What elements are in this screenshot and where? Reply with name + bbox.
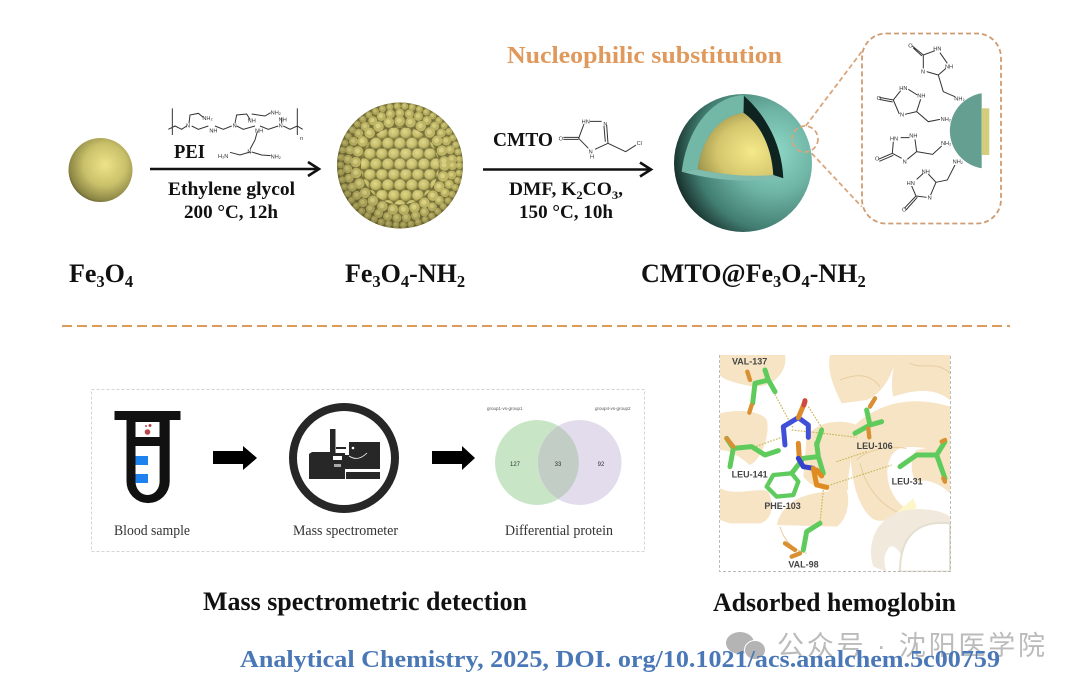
- Fe3O4 sphere: [68, 138, 132, 202]
- conditions: step one: [168, 180, 295, 223]
- image frame: [720, 355, 950, 572]
- grafted CMTO molecules: O: [902, 207, 907, 213]
- icon: mass spectrometer: [293, 407, 395, 509]
- residue sticks: [727, 370, 945, 550]
- PEI polymer structure: N: [186, 124, 190, 130]
- label: Fe3O4-NH2: 4: [401, 272, 409, 291]
- PEI polymer structure: NH: [248, 119, 256, 125]
- caption: mass spectrometric detection: Mass spectrometric detection: [203, 587, 528, 616]
- grafted CMTO molecules: HN: [899, 86, 907, 92]
- PEI polymer structure: NH: [255, 129, 263, 135]
- icon: blood test tube: [114, 411, 180, 503]
- grafted CMTO molecules: HN: [933, 47, 941, 53]
- grafted CMTO molecules: O: [908, 43, 913, 49]
- label: Fe3O4: 3: [96, 272, 105, 291]
- grafted CMTO molecules: N: [900, 113, 904, 119]
- label: Fe3O4: O: [105, 259, 125, 288]
- venn diagram: [487, 406, 631, 505]
- label: Fe3O4: Fe: [69, 259, 96, 288]
- grafted CMTO molecules: O: [877, 96, 882, 102]
- venn diagram: 127: [510, 462, 521, 468]
- grafted CMTO molecules: N: [903, 159, 907, 165]
- PEI polymer structure: NH₂: [202, 116, 213, 122]
- grafted CMTO molecules: N: [928, 195, 932, 201]
- grafted CMTO molecules: HN: [890, 137, 898, 143]
- grafted CMTO molecules: NH: [945, 64, 953, 70]
- citation: Analytical Chemistry, 2025, DOI. org/10.1021/acs.analchem.5c00759: [240, 646, 1000, 673]
- Fe3O4-NH2 bead sphere: [337, 102, 463, 228]
- label: Fe3O4-NH2: O: [381, 259, 401, 288]
- PEI polymer structure: N: [279, 124, 283, 130]
- grafted CMTO molecules: NH: [909, 133, 917, 139]
- ligand sticks: [783, 401, 827, 487]
- residue labels: VAL-98: [788, 559, 819, 569]
- label: CMTO@Fe3O4-NH2: 2: [857, 272, 866, 291]
- inset panel: surface functionalisation: [862, 34, 1001, 224]
- heading: nucleophilic substitution: Nucleophilic substitution: [507, 43, 782, 69]
- grafted CMTO molecules: NH₂: [941, 117, 951, 123]
- core-shell sphere: [674, 94, 812, 232]
- caption: blood sample: Blood sample: [114, 523, 190, 539]
- arrow: step one: [150, 162, 319, 176]
- pale ribbon lower right: [871, 498, 950, 572]
- panel: mass spectrometry workflow: [92, 390, 644, 552]
- protein docking image: [719, 355, 951, 572]
- residue labels: LEU-106: [857, 441, 893, 451]
- label: Fe3O4-NH2: 3: [372, 272, 381, 291]
- PEI polymer structure: NH₂: [271, 154, 281, 160]
- surface half disc: [950, 93, 982, 168]
- residue labels: PHE-103: [764, 501, 801, 511]
- label: CMTO@Fe3O4-NH2: CMTO@Fe: [641, 259, 773, 288]
- grafted CMTO molecules: NH: [922, 169, 930, 175]
- conditions: step two: 150 °C, 10h: [519, 203, 614, 223]
- grafted CMTO molecules: NH₂: [954, 97, 965, 103]
- conditions: step two: DMF, K: [509, 180, 573, 200]
- conditions: step one: 200 °C, 12h: [184, 203, 279, 223]
- residue labels: LEU-141: [732, 469, 768, 479]
- caption: adsorbed hemoglobin: Adsorbed hemoglobin: [713, 588, 957, 617]
- grafted CMTO molecules: NH₂: [953, 159, 963, 165]
- label: CMTO@Fe3O4-NH2: -NH: [810, 259, 857, 288]
- label: Fe3O4-NH2: Fe: [345, 259, 372, 288]
- CMTO molecule: HN: [582, 119, 590, 125]
- arrow: blood to spectrometer: [213, 446, 257, 470]
- CMTO molecule: O: [559, 137, 564, 143]
- conditions: step two: [509, 180, 623, 223]
- PEI polymer structure: NH: [279, 118, 287, 124]
- venn diagram: 33: [555, 462, 562, 468]
- venn diagram: group4-vs-group2: [595, 406, 631, 411]
- PEI polymer structure: H₂N: [218, 154, 228, 160]
- core strip: [982, 108, 989, 155]
- PEI polymer structure: NH₂: [271, 110, 281, 116]
- caption: mass spectrometer: Mass spectrometer: [293, 523, 398, 539]
- label: CMTO@Fe3O4-NH2: 3: [773, 272, 781, 291]
- CMTO molecule: [559, 119, 642, 160]
- label: Fe3O4-NH2: -NH: [409, 259, 457, 288]
- zoom callout lines and circle: [792, 52, 862, 207]
- contact lines: [753, 392, 892, 523]
- PEI polymer structure: n: [300, 136, 303, 142]
- arrow: spectrometer to venn: [432, 446, 475, 470]
- conditions: step two: CO: [583, 180, 612, 200]
- conditions: step one: Ethylene glycol: [168, 180, 295, 200]
- conditions: step two: ,: [618, 180, 623, 200]
- venn diagram: group1-vs-group1: [487, 406, 523, 411]
- residue labels: [732, 356, 923, 569]
- label: Fe3O4-NH2: 2: [457, 272, 465, 291]
- label: CMTO@Fe3O4-NH2: O: [781, 259, 802, 288]
- residue labels: LEU-31: [892, 476, 923, 486]
- CMTO molecule: N: [589, 149, 593, 155]
- section divider: [62, 325, 1010, 327]
- conditions: step two: 2: [576, 188, 583, 202]
- arrow: step two: [483, 162, 651, 176]
- PEI polymer structure: [168, 108, 303, 160]
- CMTO molecule: Cl: [637, 141, 642, 147]
- watermark: 公众号 · 沈阳医学院: [777, 631, 1045, 661]
- residue orange tips: [727, 372, 945, 557]
- reagent label: CMTO: CMTO: [493, 129, 553, 151]
- grafted CMTO molecules: N: [921, 69, 925, 75]
- caption: differential protein: Differential protein: [505, 523, 614, 539]
- grafted CMTO molecules: NH: [917, 94, 925, 100]
- reagent label: PEI: PEI: [174, 141, 205, 163]
- conditions: step two: 3: [612, 188, 618, 202]
- grafted CMTO molecules: HN: [907, 181, 915, 187]
- PEI polymer structure: NH: [209, 129, 217, 135]
- grafted CMTO molecules: [875, 43, 965, 213]
- CMTO molecule: H: [590, 154, 594, 160]
- label: Fe3O4: 4: [125, 272, 133, 291]
- PEI polymer structure: N: [233, 124, 237, 130]
- grafted CMTO molecules: NH₂: [941, 141, 951, 147]
- CMTO molecule: N: [603, 122, 607, 128]
- protein ribbons: [720, 355, 950, 527]
- label: CMTO@Fe3O4-NH2: 4: [802, 272, 810, 291]
- residue labels: VAL-137: [732, 356, 767, 366]
- grafted CMTO molecules: O: [875, 157, 880, 163]
- PEI polymer structure: N: [247, 149, 251, 155]
- venn diagram: 92: [598, 462, 605, 468]
